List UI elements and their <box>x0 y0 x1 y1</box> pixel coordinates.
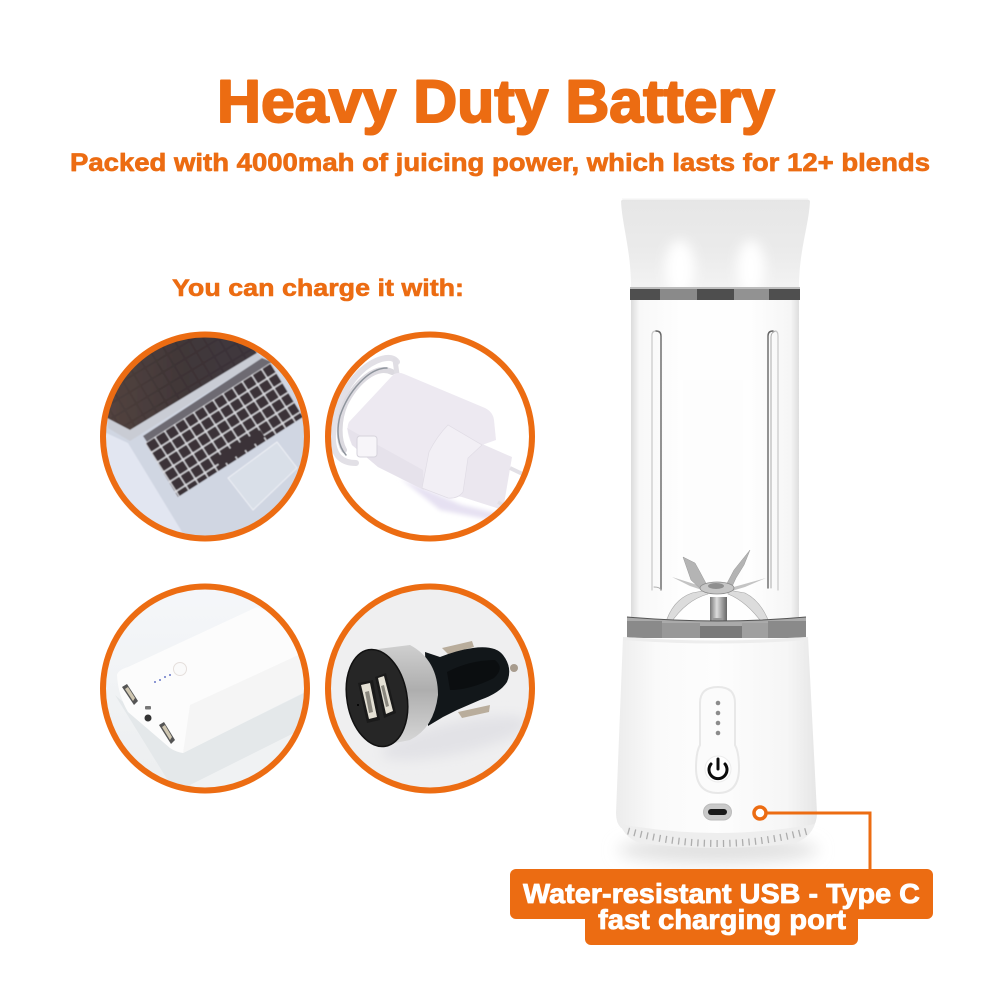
callout label: Water-resistant USB - Type C <box>523 878 920 909</box>
base seal band <box>627 617 806 638</box>
battery indicator dots <box>716 701 720 735</box>
ground shadow <box>618 836 818 864</box>
subtitle: Packed with 4000mah of juicing power, which lasts for 12+ blends <box>70 149 930 177</box>
circle photo: car charger <box>325 580 535 795</box>
blender product image <box>615 195 818 864</box>
callout label: fast charging port <box>598 904 846 935</box>
lid seal band <box>630 287 800 300</box>
title: Heavy Duty Battery <box>217 68 776 135</box>
blade assembly <box>665 550 771 628</box>
transparent jar <box>631 300 799 620</box>
coiled cable <box>333 358 397 463</box>
control panel <box>696 687 739 793</box>
USB-C port <box>704 804 732 820</box>
charging options heading: You can charge it with: <box>172 275 464 302</box>
circle photo: power bank <box>100 580 320 800</box>
callout label <box>510 869 933 945</box>
jar ridge left <box>652 331 661 590</box>
lid <box>621 200 810 287</box>
callout connector <box>754 807 870 870</box>
base body <box>616 637 817 835</box>
circle photo: power adapter <box>325 330 535 545</box>
circle photo: laptop <box>100 330 310 545</box>
jar ridge right <box>768 331 778 590</box>
base foot with vents <box>620 824 815 848</box>
power icon <box>705 756 731 782</box>
